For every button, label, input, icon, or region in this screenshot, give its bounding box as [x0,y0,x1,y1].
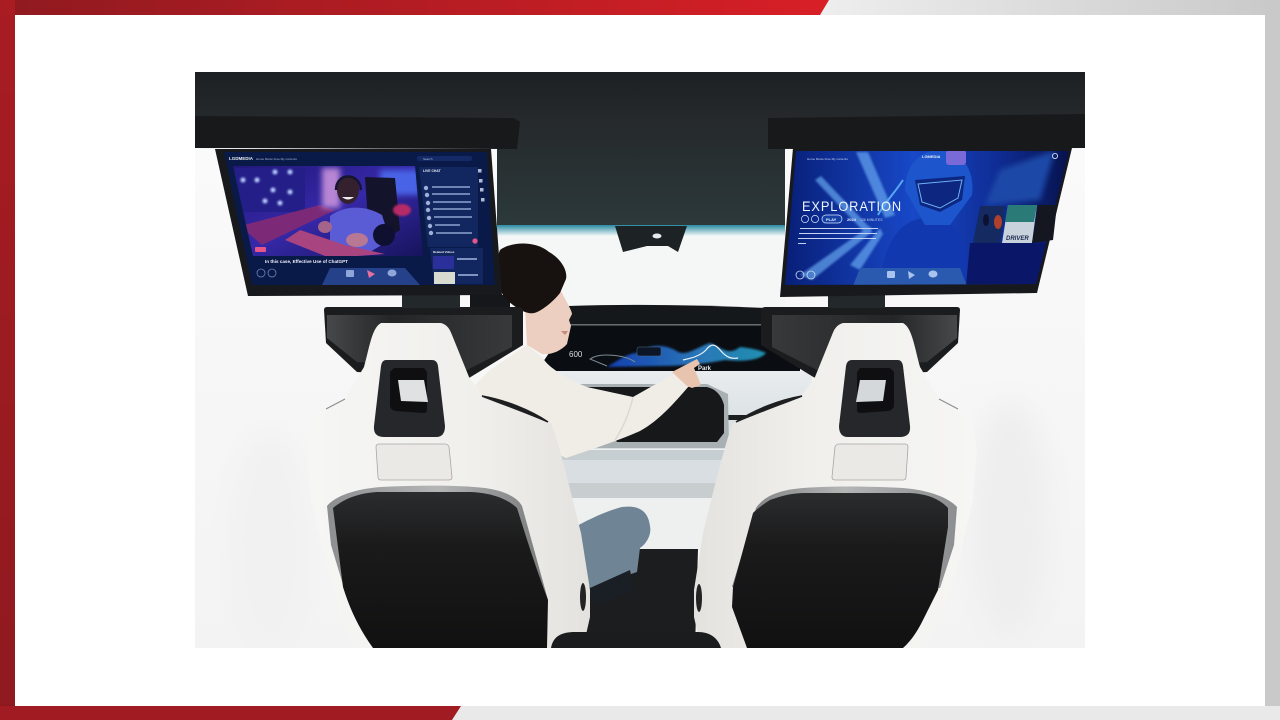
pillar-to-pillar display [537,326,800,372]
thumbnail 2: DRIVER [1006,236,1029,242]
black back panel [732,493,948,648]
battery readout: 600 [569,350,583,359]
chair [365,177,400,250]
windshield recess [497,116,785,228]
left overhead bar [195,116,520,149]
face [525,285,572,354]
header nav: Home Movie Free My contents [807,157,848,161]
trousers [579,506,650,588]
map card [637,347,661,356]
handle surround [374,360,445,437]
handle window [398,380,428,402]
handle surround [839,360,910,437]
hand [672,359,701,388]
seat badge [376,444,452,480]
header nav: Home Movie Free My contents [256,157,297,161]
dashboard [537,371,812,449]
search bar [417,156,472,161]
pink pillow [393,204,411,216]
lower dashboard [561,450,724,498]
thumbnail 1 [973,206,1005,243]
glowing shelf items [240,170,292,206]
left screen mount [402,292,460,308]
left display [215,149,502,296]
display panel [785,150,1070,286]
shoes [590,570,631,588]
desk [240,205,335,245]
hand [346,233,368,247]
video frame [233,166,423,258]
console rim [575,384,729,448]
light rays [800,152,895,280]
rearview camera [615,226,687,252]
torso [330,208,390,252]
header logo: LGDMEDIA [229,156,254,161]
helmet [905,150,972,225]
windshield [497,225,785,236]
arm [285,230,385,258]
display panel [224,152,495,285]
thumbnail 2 [1002,205,1037,243]
play row: 2024 [847,217,857,222]
shoulder strap [482,396,548,422]
headrest frame [761,307,960,378]
handle window [856,380,886,402]
seat shell [694,323,977,648]
silver rim [732,486,957,588]
outer seam [939,399,958,409]
dark slit [728,415,754,420]
title: EXPLORATION [802,198,902,214]
profile icon [1052,153,1058,159]
microphone [373,224,395,246]
side icons [478,169,484,202]
pill icons [346,270,396,278]
map wave [607,343,766,367]
visor outline [918,180,962,208]
play row: PLAY [826,217,837,222]
lower slot [696,584,702,612]
right screen mount [828,292,885,308]
related videos panel [430,248,483,284]
wall background [195,362,1085,648]
handle opening [390,368,427,413]
head [337,176,359,204]
headrest screen [327,315,512,370]
helmet cap [946,150,966,165]
bottom pill [853,268,967,286]
figure body [880,218,967,284]
play row [801,215,883,223]
destination text: Park [698,366,712,372]
sweater [470,345,689,458]
right seat [694,307,977,648]
video title: In this case, Effective Use of ChatGPT [265,259,348,264]
lips [561,331,568,335]
hand [318,221,332,233]
visor [915,176,965,212]
pill icons [887,270,938,279]
background signage [985,150,1055,205]
floor [586,549,698,632]
ceiling panel [195,72,1085,118]
thumbnail 3 [1032,205,1057,243]
handle opening [857,368,894,413]
play row: 126 MINUTES [860,218,883,222]
video progress chip [255,247,266,252]
bottom action pill [322,268,420,285]
live chat panel [419,167,478,247]
left seat [307,307,590,648]
console screen [580,387,724,442]
live chat panel: LIVE CHAT [423,169,442,173]
description [798,228,878,244]
centre console armrest [551,632,721,648]
shoulder strap [736,396,802,422]
round controls [257,269,276,277]
brand: LGMEDIA [922,154,941,159]
person [470,244,701,458]
outer seam [326,399,345,409]
helmet hair [878,180,903,215]
dark lower right [966,243,1050,286]
silver rim [327,486,548,600]
screen mount shadow behind head [470,295,510,307]
photo: vehicle interior [195,72,1085,650]
headrest frame [324,307,523,378]
seat shell [360,323,590,648]
display housing [568,304,763,326]
round controls [796,271,815,279]
neon shelf [235,168,305,212]
wall glow [322,168,340,208]
related videos panel: Related Videos [433,250,455,254]
black back panel [333,492,548,648]
display body [215,149,502,296]
right overhead bar [768,114,1085,149]
smile [342,197,354,200]
seat badge [832,444,908,480]
search bar: Search [423,157,433,161]
right display [780,148,1072,297]
headrest screen [772,315,957,370]
hair [497,244,566,313]
sleeve shadow [615,397,633,440]
display body [780,148,1072,297]
right backdrop [380,170,420,195]
headset [336,176,361,190]
lower slot [580,583,586,611]
